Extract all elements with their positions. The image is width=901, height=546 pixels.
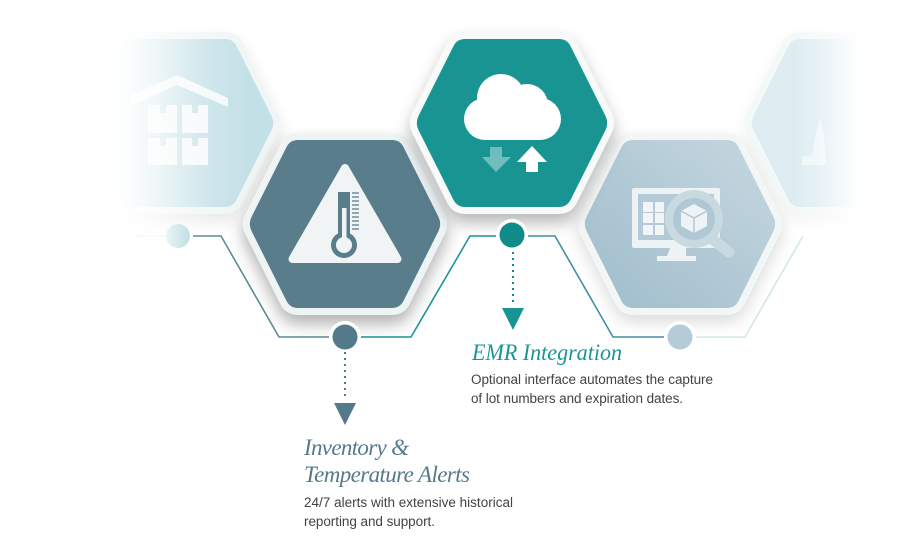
heading: Inventory and Temperature Alerts: Inventory &	[303, 435, 409, 460]
arrow: EMR dotted pointer	[502, 252, 524, 330]
icon: download arrow	[482, 147, 511, 172]
icon: upload arrow	[517, 146, 547, 172]
icon: faded fragment	[802, 118, 826, 165]
panel: monitor search hexagon	[585, 140, 775, 315]
icon: warning triangle with thermometer	[292, 168, 398, 259]
text: EMR description: of lot numbers and expiration dates.	[471, 391, 683, 406]
node: EMR dot	[496, 219, 528, 251]
heading: Inventory and Temperature Alerts: Temperature Alerts	[304, 462, 470, 487]
icon: cloud	[464, 74, 561, 140]
node: temperature dot	[329, 321, 361, 353]
panel: warehouse hexagon (faded left)	[60, 15, 273, 250]
icon: warehouse	[130, 75, 228, 165]
connector line	[135, 236, 803, 337]
heading: EMR Integration: EMR Integration	[471, 340, 622, 365]
text: alerts description: 24/7 alerts with extensive historical	[304, 495, 513, 510]
panel: fifth hexagon (faded right)	[752, 10, 901, 250]
node: warehouse dot	[166, 224, 190, 248]
arrow: temperature dotted pointer	[334, 352, 356, 425]
panel: temperature alerts hexagon	[250, 140, 440, 317]
icon: monitor with magnifier	[632, 188, 729, 261]
panel: EMR cloud hexagon	[417, 39, 607, 216]
text: alerts description: reporting and support.	[304, 514, 435, 529]
text: EMR description: Optional interface automates the capture	[471, 372, 713, 387]
node: monitor dot	[664, 321, 696, 353]
